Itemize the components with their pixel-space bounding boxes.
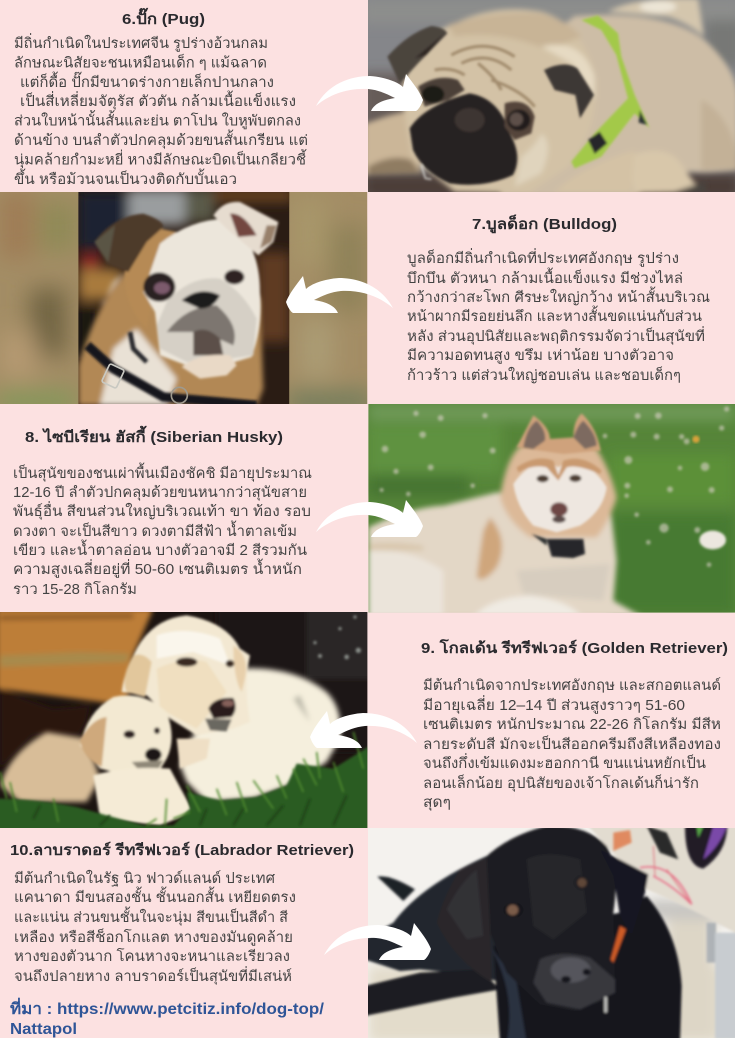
text block: husky description: พันธุ์อื่น สีขนส่วนใหญ่บริเวณเท้า ขา ท้อง รอบ — [13, 501, 311, 520]
panel: golden retriever text — [421, 638, 728, 811]
text block: golden retriever description: ลายระดับสี มักจะเป็นสีออกครีมถึงสีเหลืองทอง — [423, 734, 721, 753]
text block: pug description: ส่วนใบหน้านั้นสั้นและย่น ตาโปน ใบหูพับตกลง — [14, 110, 301, 130]
arrow: bulldog text to bulldog photo — [286, 276, 393, 313]
patterned cushion — [613, 826, 727, 904]
text block: husky description: 12-16 ปี ลำตัวปกคลุมด้วยขนหนากว่าสุนัขสาย — [13, 484, 307, 501]
text block: pug description: ขึ้น หรือม้วนจนเป็นวงติดกับบั้นเอว — [14, 168, 237, 188]
arrow: pug text to pug photo — [316, 74, 423, 111]
text block: golden retriever description: จนถึงกึ่งเข้มแดงมะฮอกกานี ขนแน่นหยักเป็น — [423, 753, 706, 772]
photo: pug — [361, 0, 735, 202]
text block: labrador description: มีต้นกำเนิดในรัฐ นิว ฟาวด์แลนด์ ประเทศ — [14, 869, 276, 887]
text block: labrador description: หางของตัวนาก โคนหางจะหนาและเรียวลง — [14, 947, 290, 965]
source credit: Nattapol — [10, 1021, 77, 1038]
text block: pug description: เป็นสี่เหลี่ยมจัตุรัส ตัวตัน กล้ามเนื้อแข็งแรง — [20, 90, 296, 110]
text block: husky description: เป็นสุนัขของชนเผ่าพื้นเมืองชัคชิ มีอายุประมาณ — [13, 462, 312, 482]
arrow: golden retriever text to golden retriever photo — [310, 711, 417, 748]
text block: golden retriever description: มีอายุเฉลี่ย 12–14 ปี ส่วนสูงราวๆ 51-60 — [423, 695, 685, 714]
text block: golden retriever description: มีต้นกำเนิดจากประเทศอังกฤษ และสกอตแลนด์ — [423, 677, 721, 694]
text block: pug description: ด้านข้าง บนลำตัวปกคลุมด้วยขนสั้นเกรียน แต่ — [14, 129, 308, 149]
text block: labrador description: เหลือง หรือสีช็อกโกแลต หางของมันดูคล้าย — [14, 927, 293, 946]
arrow: labrador text to labrador photo — [324, 923, 431, 960]
panel: pug text — [14, 7, 308, 188]
text block: bulldog description: บึกบึน ตัวหนา กล้ามเนื้อแข็งแรง มีช่วงไหล่ — [407, 267, 683, 287]
text block: golden retriever description: สุดๆ — [423, 795, 451, 811]
text block: pug description: แต่ก็ดื้อ ปั๊กมีขนาดร่างกายเล็กปานกลาง — [20, 71, 274, 91]
panel: husky text — [13, 425, 312, 598]
source credit — [10, 997, 325, 1038]
text block: pug description — [14, 33, 308, 188]
heading: golden retriever: 9. โกลเด้น รีทรีฟเวอร์ (Golden Retriever) — [421, 638, 728, 657]
text block: bulldog description: มีความอดทนสูง ขรึม เห่าน้อย บางตัวอาจ — [407, 347, 674, 364]
text block: pug description: นุ่มคล้ายกำมะหยี่ หางมีลักษณะบิดเป็นเกลียวชี้ — [14, 148, 307, 168]
text block: golden retriever description — [423, 677, 721, 811]
text block: labrador description: และแน่น ส่วนขนชั้นในจะนุ่ม สีขนเป็นสีดำ สี — [14, 906, 288, 926]
photo: bulldog — [0, 189, 373, 412]
text block: husky description: ราว 15-28 กิโลกรัม — [13, 580, 137, 598]
text block: bulldog description: ก้าวร้าว แต่ส่วนใหญ่ชอบเล่น และชอบเด็กๆ — [407, 365, 681, 384]
heading: pug: 6.ปั๊ก (Pug) — [122, 7, 205, 28]
text block: labrador description — [14, 869, 296, 985]
text block: bulldog description — [407, 248, 710, 384]
text block: husky description — [13, 462, 312, 598]
text block: bulldog description: กว้างกว่าสะโพก ศีรษะใหญ่กว้าง หน้าสั้นบริเวณ — [407, 286, 710, 306]
text block: golden retriever description: เซนติเมตร หนักประมาณ 22-26 กิโลกรัม มีสีห — [423, 715, 721, 733]
source credit: ที่มา : https://www.petcitiz.info/dog-top/ — [10, 997, 325, 1018]
text block: labrador description: แคนาดา มีขนสองชั้น ชั้นนอกสั้น เหยียดตรง — [14, 886, 296, 906]
heading: husky: 8. ไซบีเรียน ฮัสกี้ (Siberian Husky) — [25, 425, 283, 446]
photo: labrador — [365, 824, 735, 1038]
text block: golden retriever description: ลอนเล็กน้อย อุปนิสัยของเจ้าโกลเด้นก็น่ารัก — [423, 773, 699, 792]
text block: pug description: ลักษณะนิสัยจะชนเหมือนเด็ก ๆ แม้ฉลาด — [14, 52, 267, 72]
arrow: husky text to husky photo — [316, 500, 423, 537]
grass — [0, 732, 371, 832]
clover flowers — [380, 406, 729, 567]
photo: husky — [368, 404, 735, 617]
text block: husky description: ความสูงเฉลี่ยอยู่ที่ 50-60 เซนติเมตร น้ำหนัก — [13, 558, 302, 578]
panel: labrador text — [10, 841, 354, 1038]
heading: bulldog: 7.บูลด็อก (Bulldog) — [472, 214, 617, 234]
text block: bulldog description: หน้าผากมีรอยย่นลึก และหางสั้นขดแน่นกับส่วน — [407, 305, 702, 325]
blurred side panels — [0, 192, 373, 412]
panel: bulldog text — [407, 214, 710, 384]
text block: labrador description: จนถึงปลายหาง ลาบราดอร์เป็นสุนัขที่มีเสน่ห์ — [14, 966, 292, 985]
heading: labrador: 10.ลาบราดอร์ รีทรีฟเวอร์ (Labrador Retriever) — [10, 841, 354, 859]
text block: husky description: เขียว และน้ำตาลอ่อน บางตัวอาจมี 2 สีรวมกัน — [13, 539, 307, 559]
text block: bulldog description: บูลด็อกมีถิ่นกำเนิดที่ประเทศอังกฤษ รูปร่าง — [407, 248, 679, 267]
text block: husky description: ดวงตา จะเป็นสีขาว ดวงตามีสีฟ้า น้ำตาลเข้ม — [13, 520, 297, 540]
text block: bulldog description: หลัง ส่วนอุปนิสัยและพฤติกรรมจัดว่าเป็นสุนัขที่ — [407, 326, 705, 345]
photo: golden retriever — [0, 609, 371, 832]
text block: pug description: มีถิ่นกำเนิดในประเทศจีน รูปร่างอ้วนกลม — [14, 33, 268, 52]
